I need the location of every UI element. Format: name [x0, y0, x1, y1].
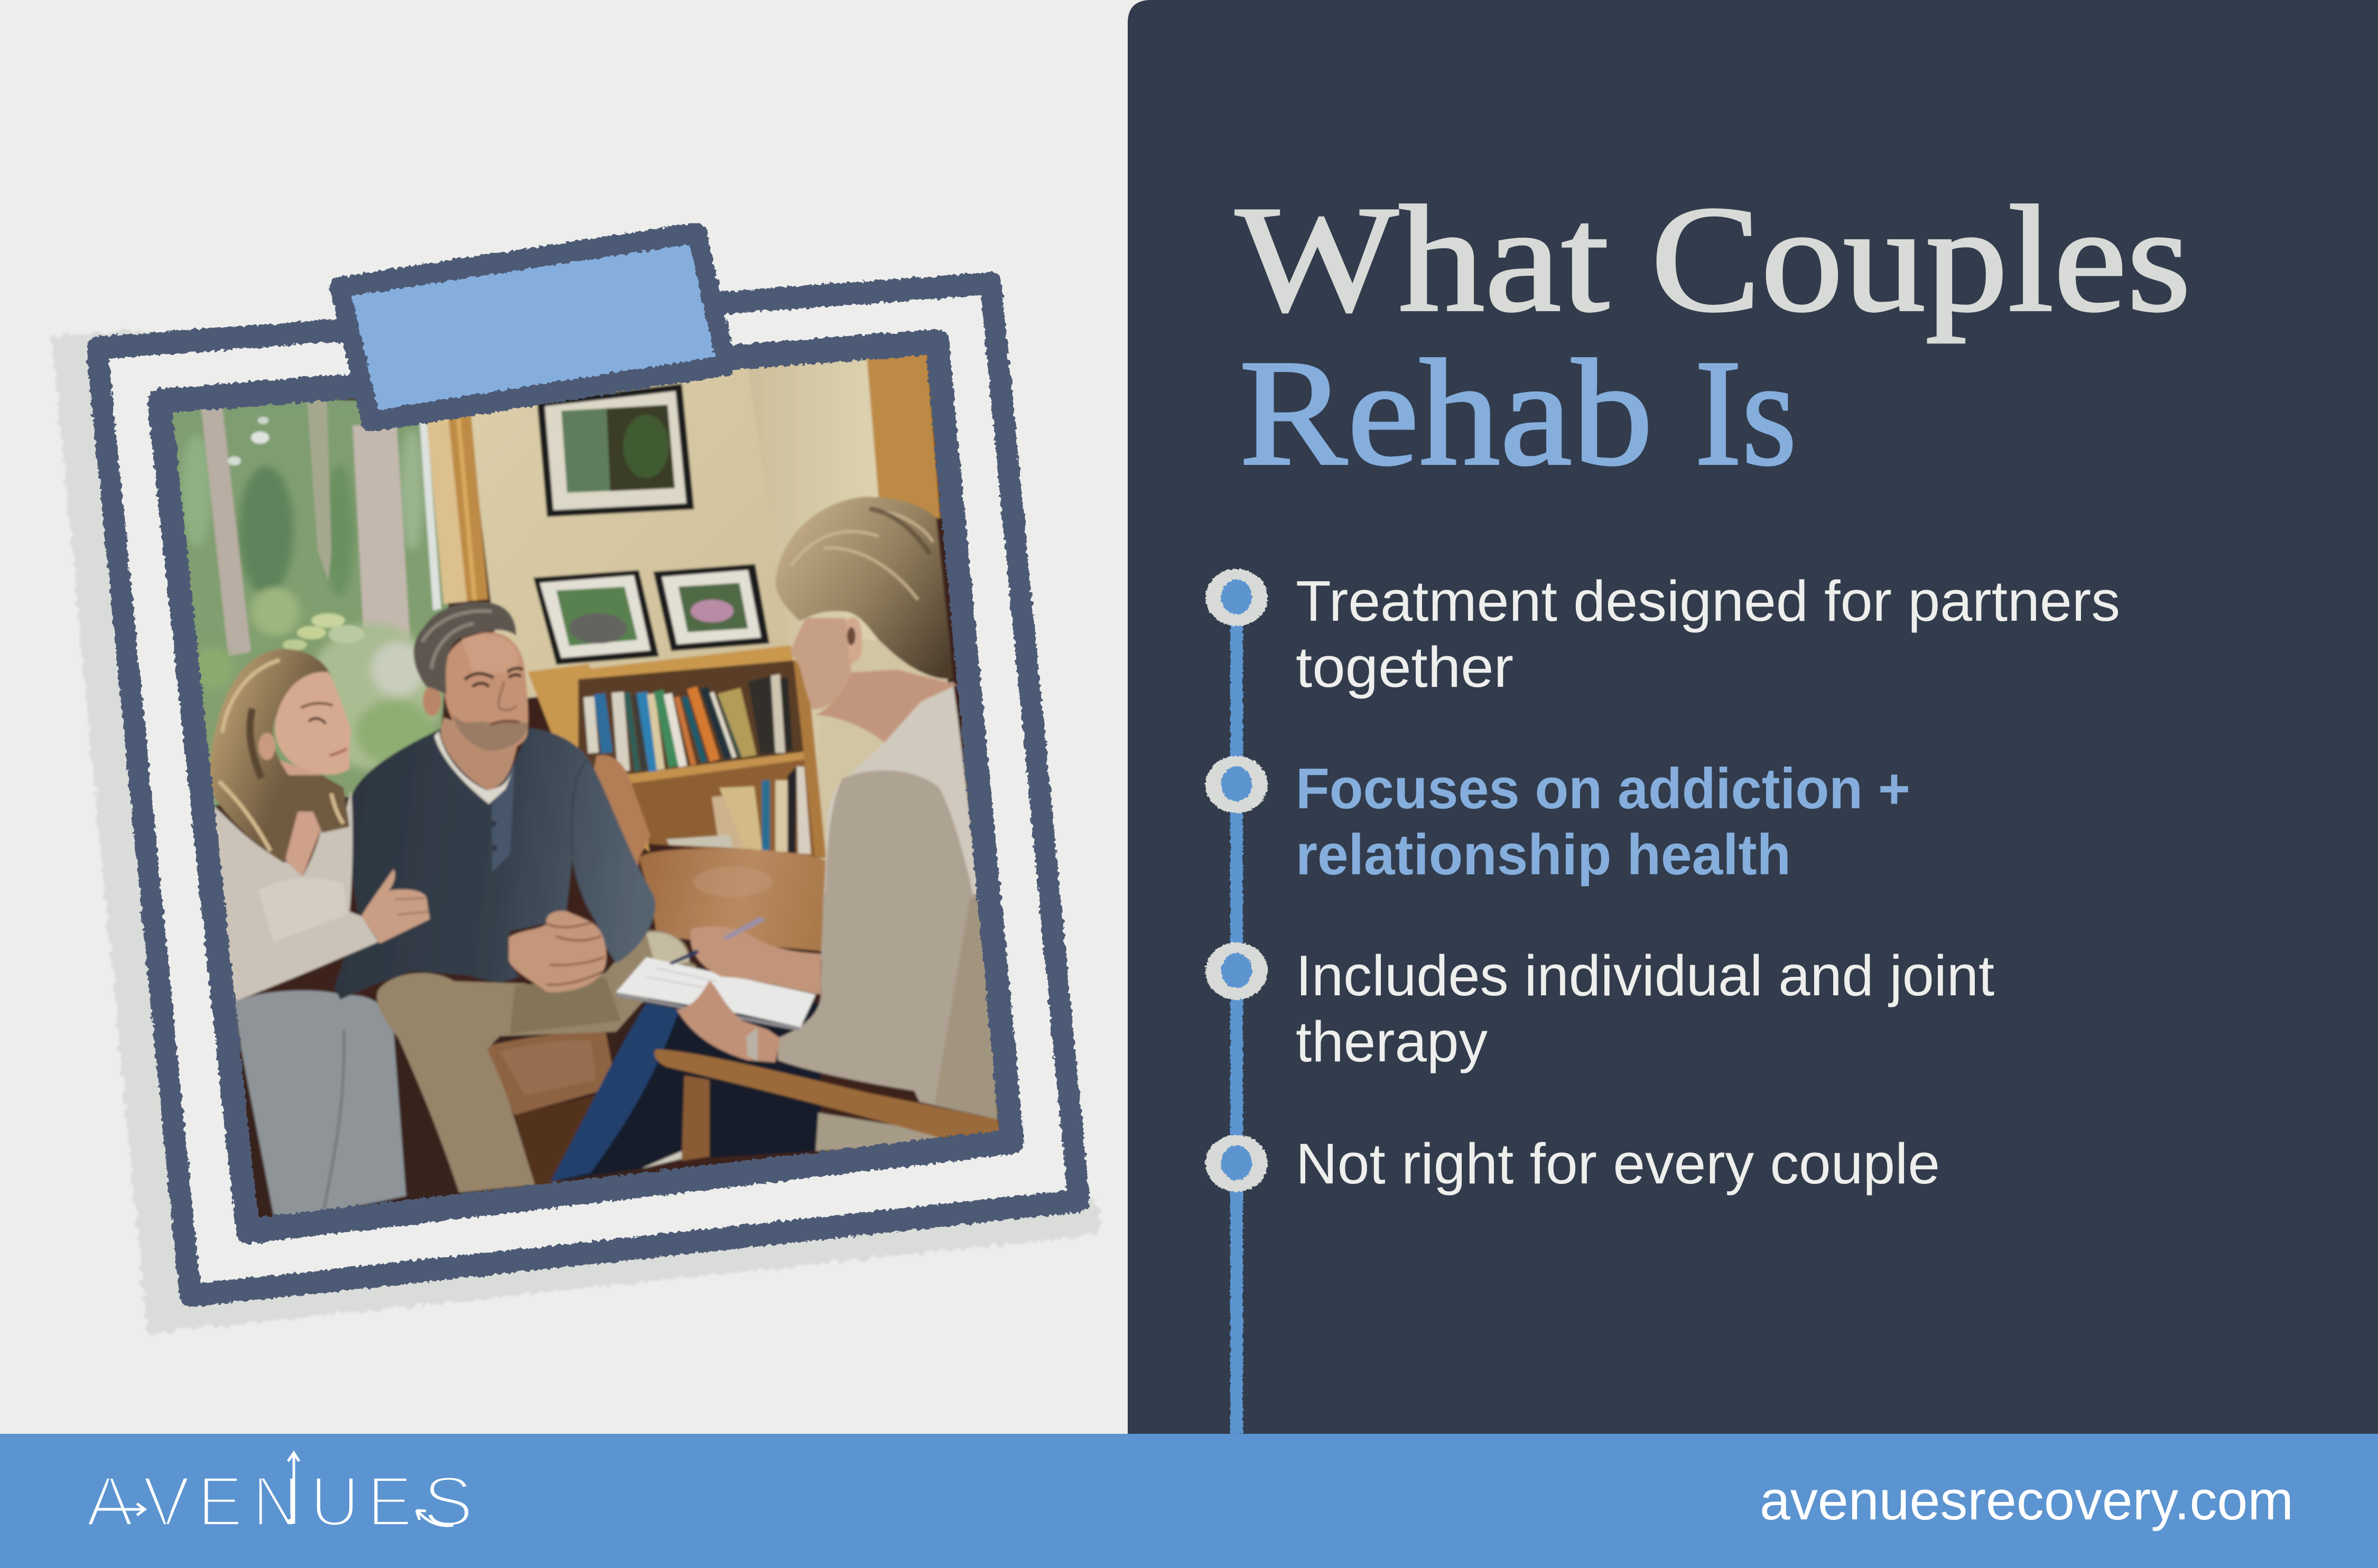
item 1: Treatment designed for partners: [1296, 569, 2120, 633]
title line 1: [1236, 175, 2191, 343]
holding hand: [676, 980, 781, 1062]
lower bodies: [234, 930, 821, 1220]
logo: Avenues: [86, 1453, 473, 1541]
frame shadow: [52, 329, 1102, 1333]
logo: Avenues: A: [86, 1462, 134, 1541]
chair arm: [654, 1049, 1003, 1138]
man's face: [443, 632, 528, 751]
timeline line: [1230, 597, 1243, 1434]
title line 2: Rehab: [1239, 329, 1653, 497]
writing hand: [691, 926, 821, 994]
item 2: Focuses on addiction +: [1296, 757, 1910, 821]
logo: Avenues: N: [253, 1462, 300, 1541]
sofa: [241, 755, 828, 1237]
bullet list: [1296, 569, 2120, 1196]
panel: dark right panel: [1128, 0, 2378, 1434]
timeline dot 1: [1205, 569, 1268, 626]
window forest: [181, 399, 488, 656]
man's clasped hands: [509, 911, 606, 992]
counselor's jeans: [550, 1003, 821, 1182]
title: [1236, 175, 2191, 497]
counselor upper body: [775, 497, 988, 960]
title line 2: [1239, 329, 1797, 497]
logo: Avenues: S: [423, 1462, 473, 1541]
item 3: [1296, 944, 1994, 1074]
outer frame: [97, 284, 1079, 1295]
room background: [172, 354, 999, 1173]
item 4: Not right for every couple: [1296, 1132, 1940, 1196]
logo: Avenues: E: [367, 1462, 412, 1541]
website url: avenuesrecovery.com: [1760, 1470, 2293, 1532]
logo: Avenues: E: [198, 1462, 243, 1541]
chair leg: [682, 1076, 710, 1161]
logo: Avenues: U: [310, 1462, 359, 1541]
woman upper body: [208, 649, 430, 1003]
tape: [340, 232, 727, 422]
timeline dot 4: [1205, 1135, 1268, 1192]
item 3: therapy: [1296, 1010, 1488, 1074]
man upper body: [335, 602, 655, 1000]
sofa seat: [241, 997, 646, 1237]
sofa back and arm: [581, 755, 828, 951]
woman's face: [275, 672, 351, 774]
logo arrows: [96, 1453, 453, 1526]
man's trousers: [377, 930, 697, 1193]
notebook: [616, 957, 816, 1028]
item 2: relationship health: [1296, 823, 1791, 887]
title line 2: Is: [1695, 329, 1797, 497]
bookcase: [560, 645, 826, 858]
woman's hand: [361, 869, 430, 944]
woman's trousers: [234, 991, 406, 1220]
title line 1: What: [1236, 175, 1610, 343]
item 3: Includes individual and joint: [1296, 944, 1994, 1008]
counselor arms, notebook and chair: [616, 894, 1003, 1161]
item 2: [1296, 757, 1910, 887]
pen: [669, 949, 700, 965]
footer bar: [0, 1434, 2378, 1568]
garden foliage: [192, 613, 440, 769]
photo frame illustration: [52, 232, 1102, 1333]
inner frame: [160, 342, 1012, 1231]
item 1: together: [1296, 635, 1513, 699]
timeline dot 2: [1205, 756, 1268, 813]
timeline: [1205, 569, 1268, 1434]
item 1: [1296, 569, 2120, 699]
title line 1: Couples: [1651, 175, 2191, 343]
timeline dot 3: [1205, 942, 1268, 1000]
wall pictures: [527, 384, 769, 852]
photo: couple with counselor: [172, 354, 1000, 1218]
logo: Avenues: V: [143, 1462, 190, 1541]
